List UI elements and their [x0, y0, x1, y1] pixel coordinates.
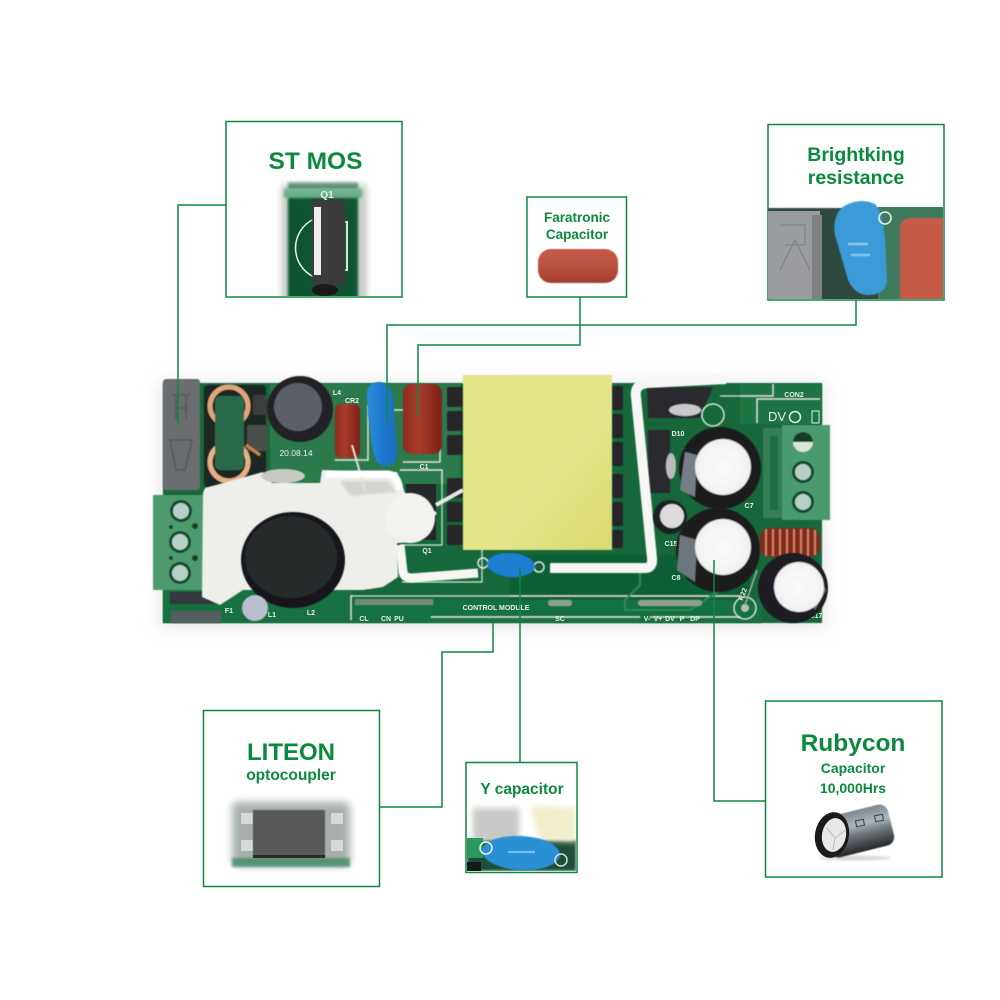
board silkscreen labels: V-: [644, 616, 651, 623]
board silkscreen labels: C17: [810, 613, 823, 620]
common mode choke with copper rings: [204, 385, 267, 487]
panel: Faratronic capacitor: Capacitor: [546, 227, 609, 242]
copper traces and silkscreen: [163, 384, 822, 623]
board silkscreen labels: CONTROL MODULE: [463, 605, 530, 612]
green terminal block left: [153, 495, 204, 590]
line: Rubycon: [714, 560, 765, 801]
panel: Rubycon capacitor: 10,000Hrs: [820, 780, 886, 796]
connector lines: [178, 205, 856, 807]
MOSFET Q1: [406, 484, 436, 540]
gray Y safety capacitor: [163, 379, 200, 490]
electrolytic capacitor C17: [734, 553, 828, 623]
red Faratronic film capacitor: [403, 384, 442, 454]
blue Y capacitor on board: [478, 551, 544, 579]
image: optocoupler chip: [232, 802, 350, 867]
electrolytic capacitor C7: [679, 427, 761, 509]
board silkscreen labels: C1: [420, 464, 429, 471]
white silicone potting: [202, 445, 463, 605]
round black inductor top: [267, 376, 333, 442]
board silkscreen labels: L1: [268, 612, 276, 619]
heading: Brightking: [807, 144, 905, 166]
copper toroid coil: [760, 528, 820, 557]
fuse IC bottom left: [170, 592, 221, 623]
board silkscreen labels: L2: [307, 610, 315, 617]
subheading: optocoupler: [246, 767, 336, 784]
board silkscreen labels: DV: [665, 616, 675, 623]
panel: Brightking resistance: resistance: [808, 167, 904, 189]
board silkscreen labels: CL: [359, 616, 369, 623]
electrolytic capacitor C8: [676, 508, 760, 592]
board silkscreen labels: L4: [333, 390, 341, 397]
heading: LITEON: [247, 739, 335, 766]
brown film capacitor CR2: [335, 404, 360, 458]
board shadow: [160, 382, 825, 628]
heading: Rubycon: [801, 730, 905, 757]
board silkscreen labels: C7: [745, 503, 754, 510]
line: LITEON: [379, 622, 493, 807]
transformer pins: [447, 386, 623, 548]
board silkscreen labels: PU: [394, 616, 404, 623]
board silkscreen labels: C8: [672, 575, 681, 582]
white heat sink strip right: [550, 379, 726, 568]
circuit board: [153, 375, 830, 628]
board silkscreen labels: CR2: [345, 398, 359, 405]
image: electrolytic capacitor: [811, 803, 896, 861]
board silkscreen labels: [225, 390, 823, 623]
subheading: Capacitor: [821, 760, 886, 776]
board silkscreen labels: CON2: [784, 392, 804, 399]
line: Faratronic: [418, 297, 580, 417]
heading: Y capacitor: [480, 781, 564, 798]
white heat sink strip left: [400, 545, 478, 578]
heading: Faratronic: [544, 210, 610, 225]
board silkscreen labels: V+: [654, 616, 662, 623]
board silkscreen labels: 20.08.14: [279, 448, 313, 458]
board silkscreen labels: D10: [672, 431, 685, 438]
panel: Brightking resistance: [768, 124, 950, 308]
image: blue varistor close-up: [768, 200, 943, 299]
panel: Faratronic capacitor: [527, 197, 626, 297]
board silkscreen labels: DP: [690, 616, 700, 623]
line: Y capacitor: [519, 566, 521, 762]
image: MOSFET close-up: Q1: [320, 190, 334, 201]
panel: ST MOS: [226, 122, 402, 300]
board substrate: [163, 383, 822, 623]
image: blue Y capacitor close-up: [467, 806, 576, 872]
right side MOS with screw: [647, 387, 724, 493]
board silkscreen labels: CN: [381, 616, 391, 623]
image: red film capacitor: [538, 249, 618, 283]
electrolytic capacitor C15: [653, 500, 687, 534]
board silkscreen labels: F1: [225, 608, 233, 615]
panel: Y capacitor: [466, 762, 577, 872]
board silkscreen labels: C15: [665, 541, 678, 548]
board silkscreen labels: R22: [738, 587, 749, 602]
heading: ST MOS: [269, 148, 362, 175]
board silkscreen labels: SC: [555, 616, 565, 623]
board silkscreen labels: P: [680, 616, 685, 623]
panel: Rubycon capacitor: [766, 701, 942, 877]
board silkscreen labels: DV: [768, 409, 786, 424]
line: Brightking: [387, 300, 856, 423]
line: ST MOS: [178, 205, 226, 425]
blue varistor: [367, 382, 397, 466]
yellow transformer: [463, 375, 612, 550]
green terminal block right: [763, 425, 830, 520]
small grey disc: [242, 595, 268, 621]
black toroidal inductor L2: [241, 512, 345, 608]
panel: LITEON optocoupler: [204, 710, 380, 886]
board silkscreen labels: Q1: [422, 548, 432, 555]
image: MOSFET close-up: [278, 180, 370, 296]
